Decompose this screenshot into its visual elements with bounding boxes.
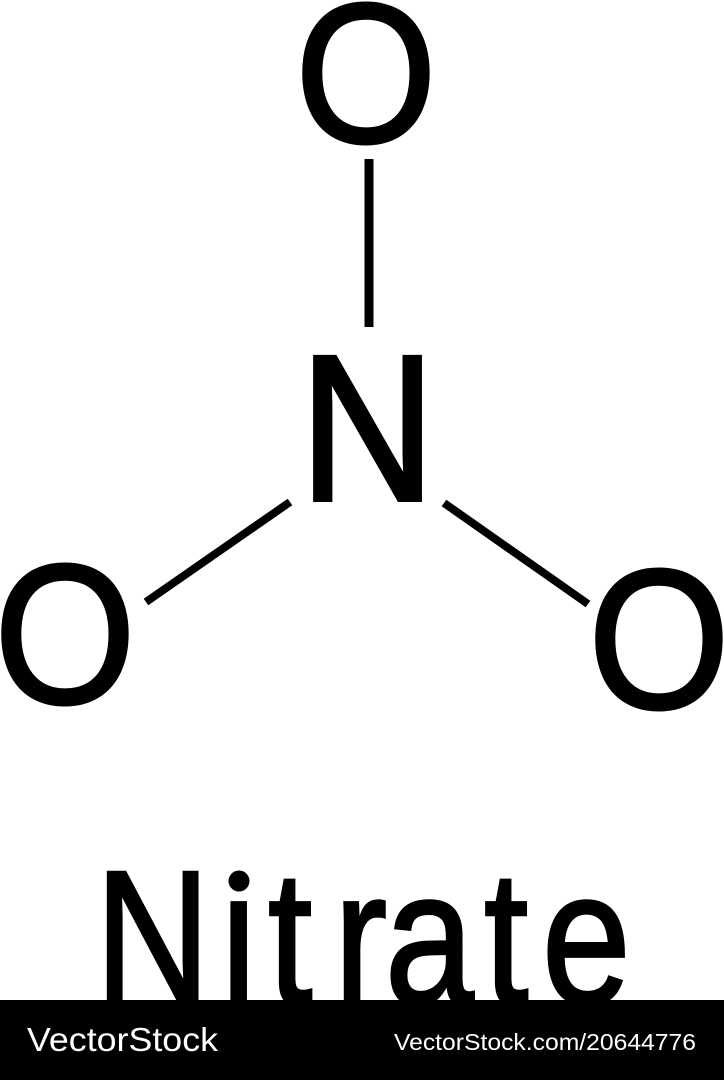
nitrogen atom: N bbox=[300, 313, 436, 545]
bond: nitrogen to left oxygen bbox=[146, 502, 290, 602]
footer brand name: VectorStock bbox=[27, 1021, 219, 1058]
footer image url: VectorStock.com/20644776 bbox=[394, 1029, 696, 1055]
bond: top oxygen to nitrogen bbox=[364, 159, 374, 327]
bond: nitrogen to right oxygen bbox=[444, 503, 588, 604]
footer bar bbox=[0, 1000, 724, 1080]
compound name label: Nitrate bbox=[95, 832, 631, 1044]
